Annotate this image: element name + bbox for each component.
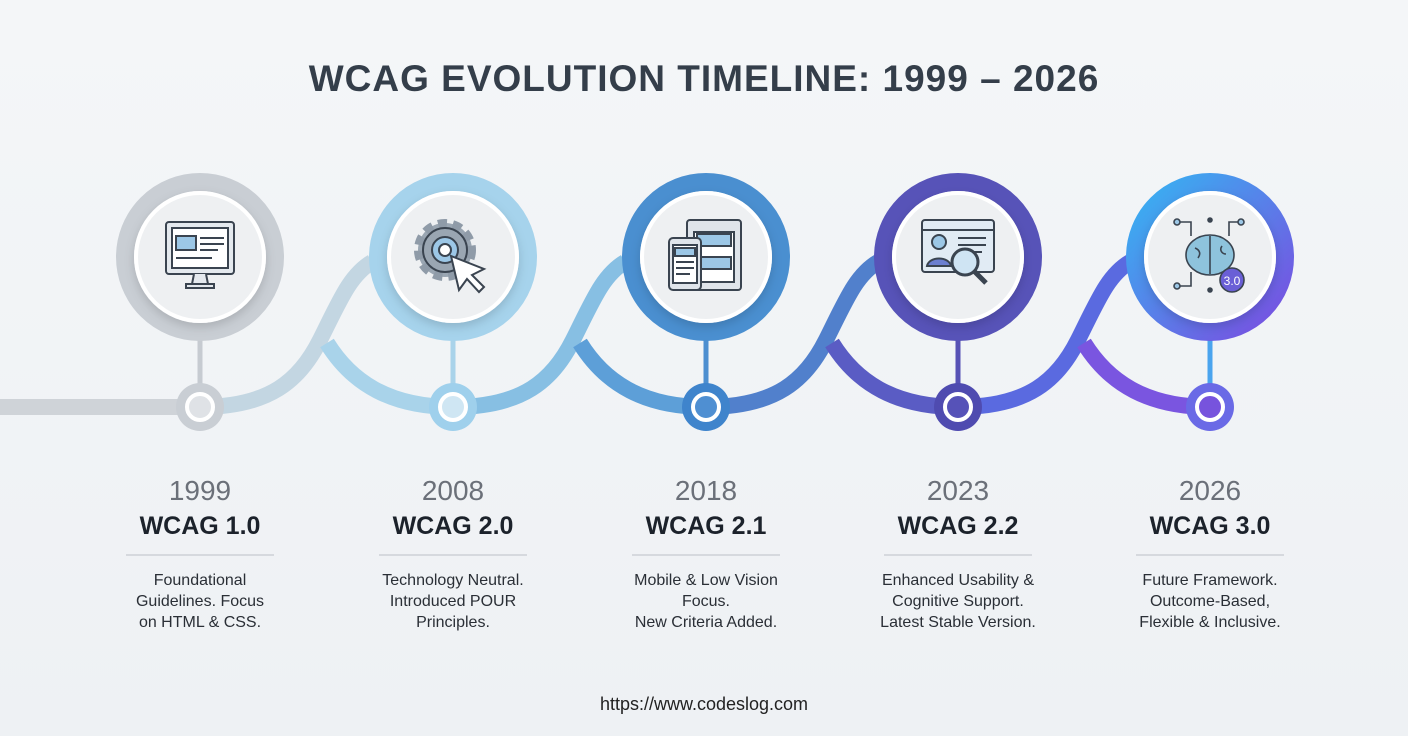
milestone 2018: Mobile & Low Vision	[634, 572, 778, 589]
milestone 2026: Flexible & Inclusive.	[1139, 614, 1281, 631]
milestone 2008: Technology Neutral.	[382, 572, 524, 589]
milestone 2008	[379, 475, 527, 631]
node 1	[125, 182, 275, 431]
milestone 2026	[1136, 475, 1284, 631]
footer url: https://www.codeslog.com	[600, 694, 808, 714]
node 5: 3.0	[1224, 274, 1241, 288]
milestone 2026: Outcome-Based,	[1150, 593, 1270, 610]
milestone 2018	[632, 475, 780, 631]
milestone 2026: Future Framework.	[1142, 572, 1278, 589]
milestone 2023: 2023	[927, 475, 989, 506]
icon: gear with cursor	[418, 223, 484, 292]
milestone 2023	[880, 475, 1036, 631]
node 3	[631, 182, 781, 431]
milestone 2023: WCAG 2.2	[898, 512, 1018, 540]
milestone 2008: 2008	[422, 475, 484, 506]
milestone 1999: on HTML & CSS.	[139, 614, 261, 631]
icon: AI brain	[1174, 218, 1244, 292]
node 5	[1135, 182, 1285, 431]
node 4	[883, 182, 1033, 431]
milestone 2008: Introduced POUR	[390, 593, 516, 610]
milestone 1999: 1999	[169, 475, 231, 506]
milestone 1999: Foundational	[154, 572, 246, 589]
milestone 2008: Principles.	[416, 614, 490, 631]
milestone 2018: WCAG 2.1	[646, 512, 766, 540]
milestone 1999: Guidelines. Focus	[136, 593, 264, 610]
milestone 1999	[126, 475, 274, 631]
milestone 2018: New Criteria Added.	[635, 614, 777, 631]
node 2	[378, 182, 528, 431]
milestone 2023: Enhanced Usability &	[882, 572, 1034, 589]
milestone 2026: 2026	[1179, 475, 1241, 506]
milestone 2023: Latest Stable Version.	[880, 614, 1036, 631]
icon: monitor	[166, 222, 234, 288]
milestone 2018: Focus.	[682, 593, 730, 610]
milestone 2008: WCAG 2.0	[393, 512, 513, 540]
wave path	[0, 262, 1210, 407]
milestone 2026: WCAG 3.0	[1150, 512, 1270, 540]
milestone 2023: Cognitive Support.	[892, 593, 1024, 610]
milestone 1999: WCAG 1.0	[140, 512, 260, 540]
milestone 2018: 2018	[675, 475, 737, 506]
icon: devices	[669, 220, 741, 290]
title: WCAG EVOLUTION TIMELINE: 1999 – 2026	[309, 58, 1099, 99]
icon: profile search	[922, 220, 994, 283]
